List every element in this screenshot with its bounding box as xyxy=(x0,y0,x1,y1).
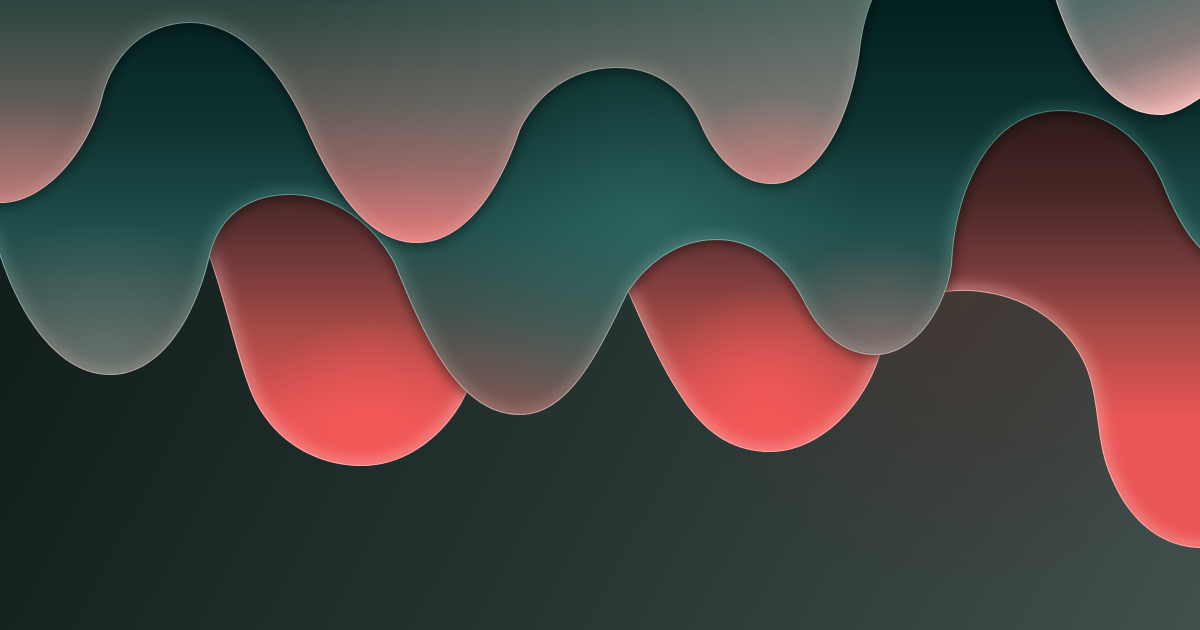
coral wave layer xyxy=(210,111,1200,548)
top right corner blob xyxy=(1040,0,1200,115)
upper grey-pink wave layer xyxy=(0,0,880,243)
teal wave layer xyxy=(0,0,1200,415)
